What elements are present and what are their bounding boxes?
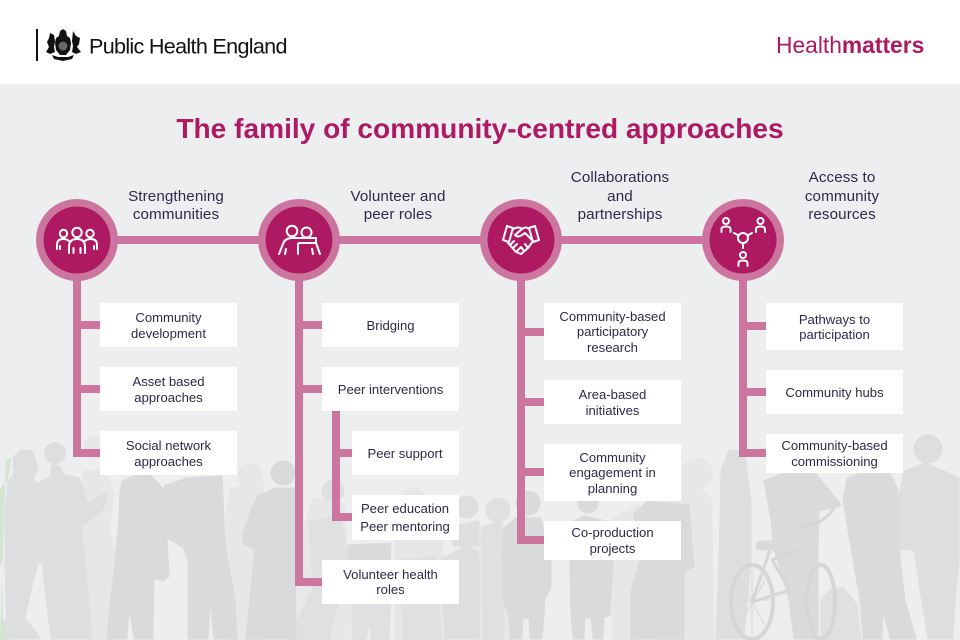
- box: asset based approaches: approaches: [134, 390, 203, 405]
- box: community-based participatory research: [544, 303, 681, 360]
- box: co-production projects: [544, 521, 681, 560]
- box: co-production projects: Co-production: [571, 525, 654, 540]
- box: asset based approaches: Asset based: [132, 374, 205, 389]
- box: peer interventions: Peer interventions: [338, 382, 444, 397]
- title: The family of community-centred approaches: [176, 113, 784, 144]
- box: volunteer health roles: [322, 560, 459, 604]
- logo: Public Health England: Public Health England: [89, 34, 287, 58]
- box: community development: development: [131, 326, 206, 341]
- box: community hubs: Community hubs: [785, 385, 884, 400]
- panel: collaborations and partnerships: [480, 169, 681, 560]
- box: community-based participatory research: participatory: [577, 324, 649, 339]
- icon: royal crest: [46, 29, 81, 61]
- box: community engagement in planning: planning: [588, 481, 637, 496]
- tree connector: [73, 240, 100, 457]
- box: peer support: Peer support: [368, 446, 443, 461]
- tree connector: [739, 240, 766, 457]
- box: community engagement in planning: engagement in: [569, 465, 656, 480]
- box: social network approaches: approaches: [134, 454, 203, 469]
- logo: Healthmatters: Healthmatters: [776, 32, 924, 58]
- sub-tree connector: [332, 411, 352, 521]
- box: community hubs: [766, 370, 903, 414]
- heading: access to community resources: community: [805, 188, 879, 205]
- icon: connected people network: [702, 199, 784, 281]
- box: bridging: Bridging: [366, 318, 415, 333]
- heading: collaborations and partnerships: Collaborations: [571, 169, 670, 186]
- main connecting line: [77, 236, 743, 244]
- header band: [0, 0, 960, 84]
- box: volunteer health roles: roles: [376, 582, 405, 597]
- icon: handshake: [480, 199, 562, 281]
- box: bridging: [322, 303, 459, 347]
- box: community-based commissioning: commissioning: [791, 454, 878, 469]
- box: community-based participatory research: Community-based: [559, 309, 666, 324]
- box: community engagement in planning: [544, 444, 681, 501]
- box: co-production projects: projects: [590, 541, 636, 556]
- box: peer support: [352, 431, 459, 475]
- icon: two people with arm round shoulder: [258, 199, 340, 281]
- box: peer education and mentoring: Peer education: [361, 501, 449, 516]
- heading: volunteer and peer roles: peer roles: [364, 206, 433, 223]
- box: community-based commissioning: Community-based: [781, 438, 888, 453]
- box: community-based commissioning: [766, 434, 903, 473]
- box: pathways to participation: [766, 303, 903, 350]
- box: peer interventions: [322, 367, 459, 411]
- box: social network approaches: Social network: [126, 438, 212, 453]
- box: volunteer health roles: Volunteer health: [343, 567, 438, 582]
- heading: access to community resources: Access to: [809, 169, 875, 186]
- heading: strengthening communities: communities: [133, 206, 219, 223]
- logo: Public Health England: [36, 29, 287, 61]
- heading: volunteer and peer roles: Volunteer and: [350, 188, 446, 205]
- box: asset based approaches: [100, 367, 237, 411]
- box: area-based initiatives: Area-based: [579, 387, 646, 402]
- box: peer education and mentoring: Peer mentoring: [360, 519, 450, 534]
- panel: volunteer and peer roles: [258, 188, 459, 604]
- box: community-based participatory research: research: [587, 340, 638, 355]
- box: pathways to participation: Pathways to: [799, 312, 870, 327]
- box: area-based initiatives: [544, 380, 681, 424]
- box: community development: [100, 303, 237, 347]
- panel: access to community resources: [702, 169, 903, 473]
- tree connector: [295, 240, 322, 586]
- heading: collaborations and partnerships: partnerships: [578, 206, 663, 223]
- panel: strengthening communities: [36, 188, 237, 475]
- box: pathways to participation: participation: [799, 327, 870, 342]
- background silhouettes of people: [0, 436, 958, 640]
- box: area-based initiatives: initiatives: [586, 403, 640, 418]
- box: social network approaches: [100, 431, 237, 475]
- tree connector: [517, 240, 544, 544]
- box: community development: Community: [135, 310, 202, 325]
- heading: access to community resources: resources: [808, 206, 876, 223]
- icon: group of people: [36, 199, 118, 281]
- box: community engagement in planning: Community: [579, 450, 646, 465]
- box: peer education and mentoring: [352, 495, 459, 540]
- heading: collaborations and partnerships: and: [607, 188, 633, 205]
- heading: strengthening communities: Strengthening: [128, 188, 224, 205]
